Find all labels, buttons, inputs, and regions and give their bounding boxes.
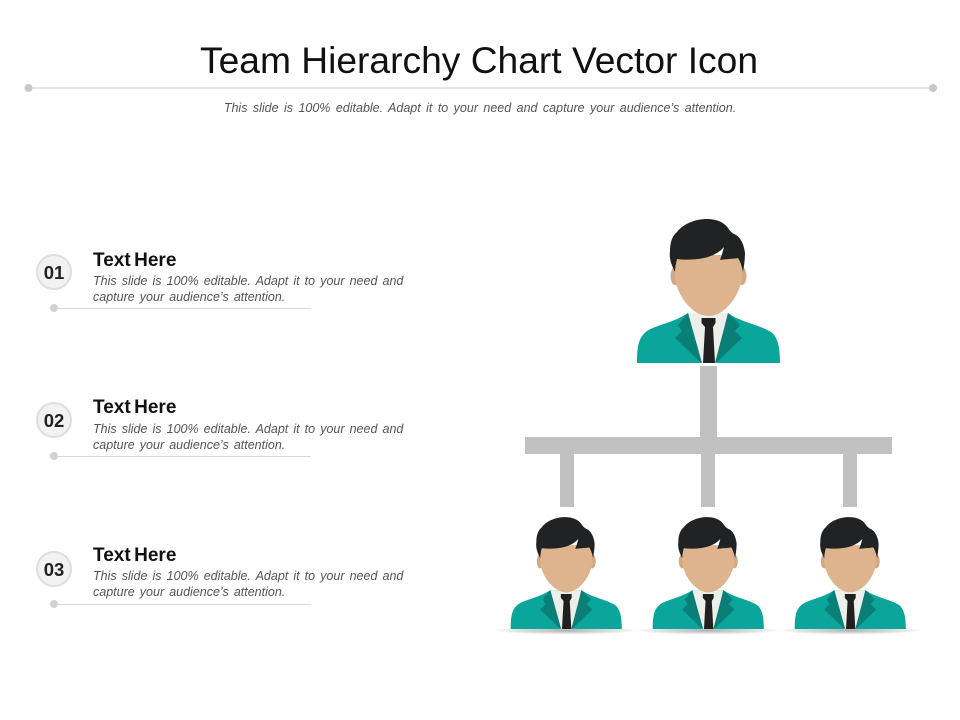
manager icon — [637, 219, 780, 363]
description 03 — [93, 569, 404, 599]
item 01 — [36, 250, 404, 312]
item 03 — [36, 545, 404, 608]
number 01: 01 — [44, 262, 64, 283]
item 02 — [36, 397, 404, 460]
connector lines — [525, 366, 892, 507]
description 03: capture your audience’s attention. — [93, 585, 285, 599]
number 03 — [36, 551, 72, 587]
rule 03 — [50, 600, 311, 608]
team member icon 1 — [493, 517, 639, 634]
subtitle: This slide is 100% editable. Adapt it to your need and capture your audience’s attention. — [224, 101, 736, 115]
description 02: This slide is 100% editable. Adapt it to your need and — [93, 422, 403, 436]
number 02 — [36, 402, 72, 438]
number 03: 03 — [44, 559, 64, 580]
heading 03: Text Here — [93, 545, 176, 566]
title: Team Hierarchy Chart Vector Icon — [200, 39, 758, 81]
title rule — [24, 84, 937, 92]
team member icon 2 — [635, 517, 781, 634]
description 02 — [93, 422, 404, 452]
description 01 — [93, 274, 404, 304]
heading 01: Text Here — [93, 250, 176, 271]
number 02: 02 — [44, 410, 64, 431]
rule 01 — [50, 304, 311, 312]
description 01: capture your audience’s attention. — [93, 290, 285, 304]
description 02: capture your audience’s attention. — [93, 438, 285, 452]
number 01 — [36, 254, 72, 290]
description 03: This slide is 100% editable. Adapt it to your need and — [93, 569, 403, 583]
heading 02: Text Here — [93, 397, 176, 418]
rule 02 — [50, 452, 311, 460]
description 01: This slide is 100% editable. Adapt it to your need and — [93, 274, 403, 288]
team member icon 3 — [777, 517, 923, 634]
